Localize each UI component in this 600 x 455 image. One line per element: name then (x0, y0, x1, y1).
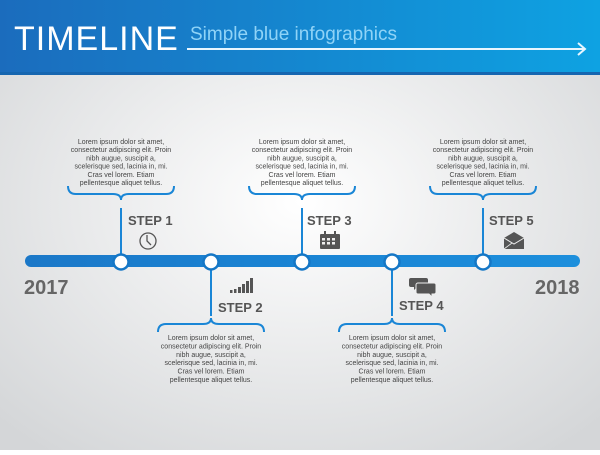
text blocks: Cras vel lorem. Etiam (269, 172, 336, 179)
text blocks: nibh augue, suscipit a, (86, 155, 156, 162)
step labels (128, 213, 534, 315)
icon: envelope (504, 232, 524, 249)
step labels: STEP 1 (128, 213, 173, 228)
text blocks: Lorem ipsum dolor sit amet, (440, 139, 526, 146)
text blocks: pellentesque aliquet tellus. (80, 180, 162, 187)
text blocks: Lorem ipsum dolor sit amet, (349, 335, 435, 342)
step labels: STEP 5 (489, 213, 534, 228)
milestone circles (114, 254, 490, 270)
year 2017: 2017 (24, 277, 68, 299)
text blocks: scelerisque sed, lacinia in, mi. (164, 360, 258, 367)
icon: calendar (320, 231, 340, 249)
icon: clock (140, 233, 156, 249)
text blocks: Lorem ipsum dolor sit amet, (78, 139, 164, 146)
timeline bar (24, 255, 580, 299)
text blocks: consectetur adipiscing elit. Proin (71, 147, 171, 154)
text blocks: Lorem ipsum dolor sit amet, (168, 335, 254, 342)
step labels: STEP 3 (307, 213, 352, 228)
text blocks: nibh augue, suscipit a, (357, 352, 427, 359)
step labels: STEP 4 (399, 298, 444, 313)
arrow (187, 43, 585, 55)
connectors and braces (68, 186, 536, 332)
text blocks: scelerisque sed, lacinia in, mi. (436, 164, 530, 171)
icon: chat bubbles (409, 278, 436, 297)
header banner (0, 0, 600, 75)
icon: signal bars (230, 278, 253, 293)
text blocks: Cras vel lorem. Etiam (88, 172, 155, 179)
text blocks: consectetur adipiscing elit. Proin (252, 147, 352, 154)
subtitle: Simple blue infographics (190, 24, 397, 45)
text blocks: scelerisque sed, lacinia in, mi. (74, 164, 168, 171)
text blocks: Cras vel lorem. Etiam (178, 369, 245, 376)
text blocks: pellentesque aliquet tellus. (442, 180, 524, 187)
step labels: STEP 2 (218, 300, 263, 315)
text blocks: Cras vel lorem. Etiam (359, 369, 426, 376)
text blocks: consectetur adipiscing elit. Proin (161, 343, 261, 350)
text blocks (71, 139, 533, 384)
text blocks: scelerisque sed, lacinia in, mi. (346, 360, 439, 367)
text blocks: nibh augue, suscipit a, (448, 155, 518, 162)
text blocks: Cras vel lorem. Etiam (450, 172, 517, 179)
text blocks: pellentesque aliquet tellus. (261, 180, 343, 187)
text blocks: nibh augue, suscipit a, (267, 155, 337, 162)
text blocks: consectetur adipiscing elit. Proin (342, 343, 442, 350)
text blocks: pellentesque aliquet tellus. (170, 377, 252, 384)
title: TIMELINE (14, 20, 179, 58)
text blocks: Lorem ipsum dolor sit amet, (259, 139, 345, 146)
year 2018: 2018 (535, 277, 580, 299)
text blocks: scelerisque sed, lacinia in, mi. (256, 164, 349, 171)
text blocks: nibh augue, suscipit a, (176, 352, 246, 359)
text blocks: consectetur adipiscing elit. Proin (433, 147, 533, 154)
text blocks: pellentesque aliquet tellus. (351, 377, 433, 384)
